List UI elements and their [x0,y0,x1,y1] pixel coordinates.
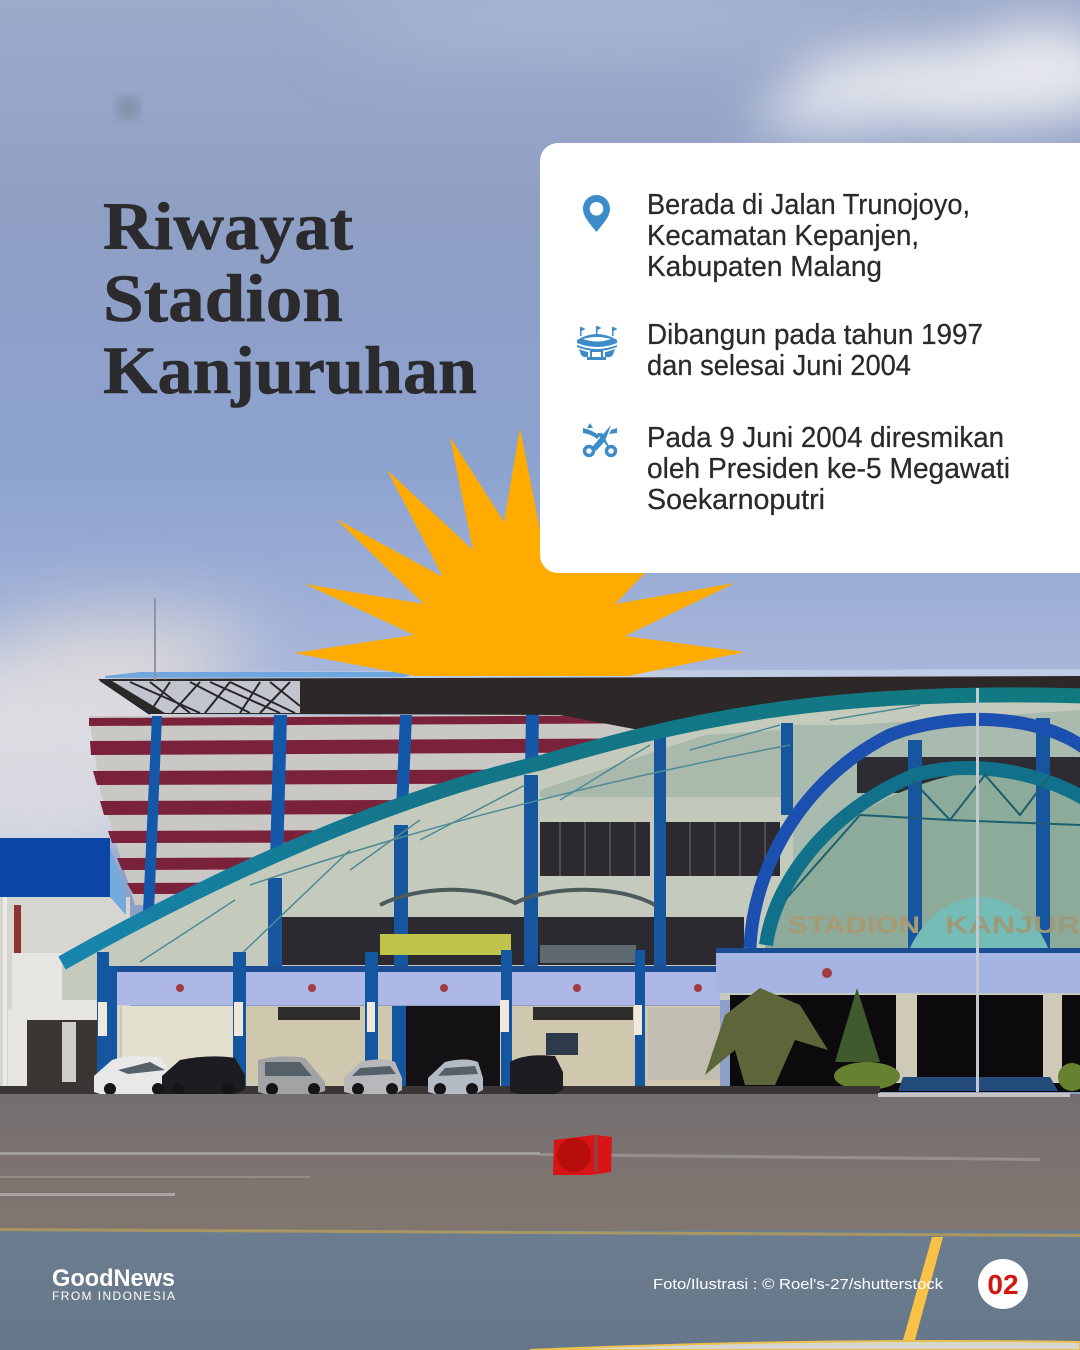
stadium sign: STADION [788,912,920,939]
ground: asphalt [0,1093,1080,1350]
main teal roof arc [62,695,1080,963]
text: location: Kecamatan Kepanjen, [647,220,919,252]
title: Stadion [103,260,343,336]
canopies and banner [380,890,655,955]
text: inauguration: oleh Presiden ke-5 Megawati [647,453,1010,485]
painted curve at bottom [530,1341,1080,1350]
icon: stadium [577,326,618,360]
wall columns [268,723,793,967]
stadium building photo [0,598,1080,1095]
right hall wall [765,718,1080,950]
stadium sign: KANJUR [945,912,1080,939]
parked cars [94,1055,563,1095]
photo credit: Foto/Ilustrasi : © Roel's-27/shutterstock [653,1277,944,1293]
text: construction: Dibangun pada tahun 1997 [647,319,983,351]
driveway curb [0,1086,880,1094]
icon: ribbon cutting scissors [583,423,617,456]
info card [540,143,1080,573]
stadium sign [788,912,1080,939]
text: location: Berada di Jalan Trunojoyo, [647,189,970,221]
red and white striped tower [89,714,700,912]
sunburst [294,428,745,676]
text: construction: dan selesai Juni 2004 [647,350,911,382]
right entrance block [716,948,1080,1092]
text: inauguration: Soekarnoputri [647,484,825,516]
title: Kanjuruhan [103,332,477,408]
blue arch [750,719,1080,948]
text: inauguration: Pada 9 Juni 2004 diresmikan [647,422,1004,454]
trees and shrubs [705,988,1080,1091]
roof [98,669,1080,732]
text: construction [647,319,983,382]
inner teal arch [766,768,1080,945]
page number badge: 02 [987,1269,1019,1300]
page number badge [978,1259,1028,1309]
title [103,188,477,408]
text: inauguration [647,422,1010,516]
window bands [282,822,780,965]
logo: GoodNews from Indonesia: FROM INDONESIA [52,1289,175,1303]
text: location [647,189,970,283]
lower facade panels [97,950,720,1092]
red traffic cone [553,1135,612,1175]
logo: GoodNews from Indonesia: GoodNews [52,1265,175,1292]
main wall under the arc [62,695,1080,1000]
upper right wall shading [540,710,1080,800]
yellow parking line [903,1237,943,1340]
dome [910,897,1048,948]
title: Riwayat [103,188,353,264]
text: location: Kabupaten Malang [647,251,882,283]
icon: location pin [583,195,610,232]
background: sky [0,0,1080,840]
flagpoles [154,598,979,1092]
left annex building [0,838,130,1094]
light floor band [540,797,780,817]
